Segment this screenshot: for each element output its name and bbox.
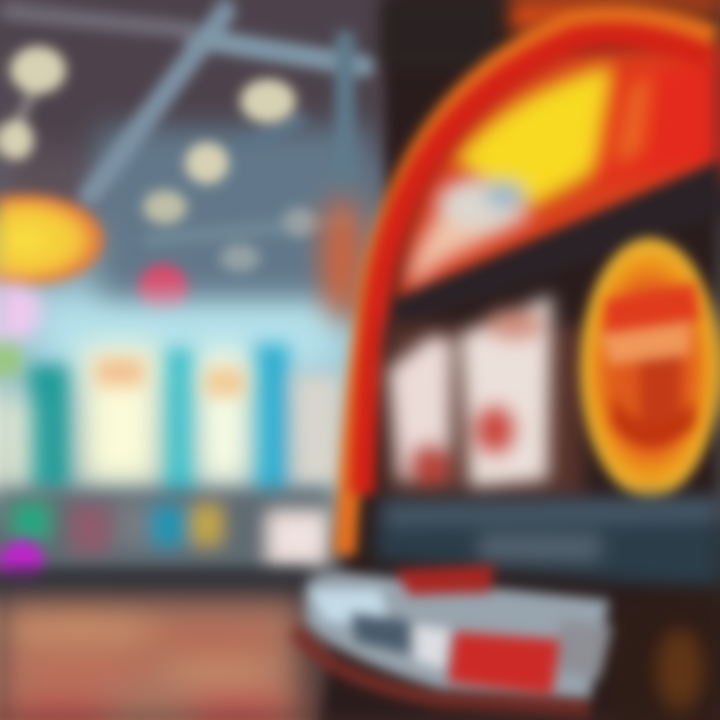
- big coin emblem: [580, 238, 720, 498]
- machine cabinet shadow: [320, 0, 720, 720]
- dark shelf: [392, 160, 720, 330]
- reel right: [460, 295, 552, 488]
- red arch frame: [345, 17, 715, 555]
- arch interior: [395, 40, 720, 320]
- pale pink glow: [0, 282, 46, 342]
- ceiling: [0, 0, 400, 320]
- yellow hanging lamp: [0, 194, 104, 286]
- dark floor edge: [0, 570, 310, 594]
- red buttons: [395, 565, 560, 695]
- screen accents: [0, 345, 245, 396]
- dark lower panel: [375, 495, 720, 590]
- top dark backdrop: [380, 0, 500, 70]
- console red rim: [295, 630, 590, 708]
- ceiling lights: [0, 46, 317, 272]
- reel housing: [385, 325, 585, 500]
- bright back wall glow: [45, 300, 335, 370]
- button console: [305, 572, 615, 700]
- machine bases: [0, 490, 330, 570]
- machine screens: [0, 345, 251, 490]
- ceiling beams: [10, 12, 365, 240]
- orange top edge: [510, 0, 720, 34]
- slot machine: foreground: [295, 0, 720, 720]
- emblem symbol: [600, 283, 700, 448]
- orange side glow: [322, 196, 362, 320]
- row of slot machines: [0, 345, 342, 584]
- magenta light: [0, 540, 44, 584]
- patterned carpet: [0, 600, 300, 720]
- lower right dark corner: [605, 590, 720, 720]
- reel left: [388, 335, 452, 480]
- reels: [388, 295, 552, 488]
- pink hanging ball: [138, 264, 188, 312]
- machine columns: [28, 345, 342, 500]
